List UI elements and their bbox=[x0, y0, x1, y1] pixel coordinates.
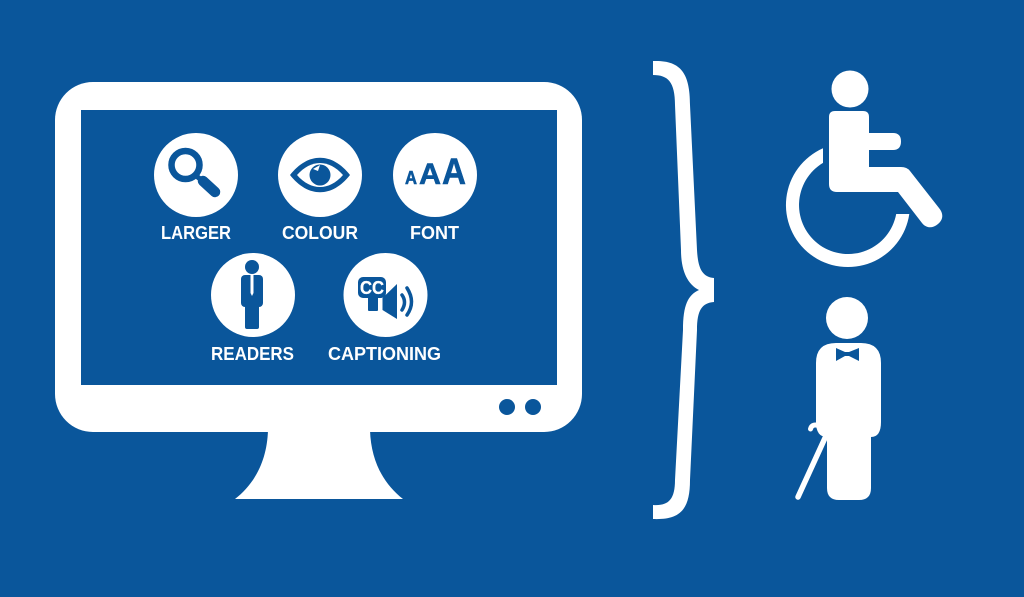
icon: wheelchair user bbox=[786, 70, 942, 267]
feature: larger text bbox=[154, 133, 238, 243]
icon: caption bubble and speaker: CC bbox=[360, 278, 384, 298]
icon: eye bbox=[290, 158, 350, 192]
bow tie bbox=[836, 348, 859, 361]
label: readers: READERS bbox=[211, 344, 294, 364]
icon: magnifying glass bbox=[172, 151, 215, 192]
label: colour: COLOUR bbox=[282, 223, 358, 243]
icon: three letter A sizes: A bbox=[405, 168, 417, 188]
curly brace bbox=[653, 61, 714, 519]
icon: person with tie bbox=[241, 260, 263, 329]
icon: three letter A sizes: A bbox=[419, 158, 441, 191]
label: larger: LARGER bbox=[161, 223, 231, 243]
icon: computer monitor bbox=[55, 82, 582, 499]
feature: screen readers bbox=[211, 253, 295, 364]
label: font: FONT bbox=[410, 223, 459, 243]
icon: person with cane bbox=[798, 297, 881, 500]
feature: font bbox=[393, 133, 477, 243]
feature: captioning bbox=[328, 253, 441, 364]
icon: three letter A sizes: A bbox=[442, 151, 466, 192]
icon: three letter A sizes bbox=[405, 151, 466, 192]
label: captioning: CAPTIONING bbox=[328, 344, 441, 364]
feature: colour bbox=[278, 133, 362, 243]
